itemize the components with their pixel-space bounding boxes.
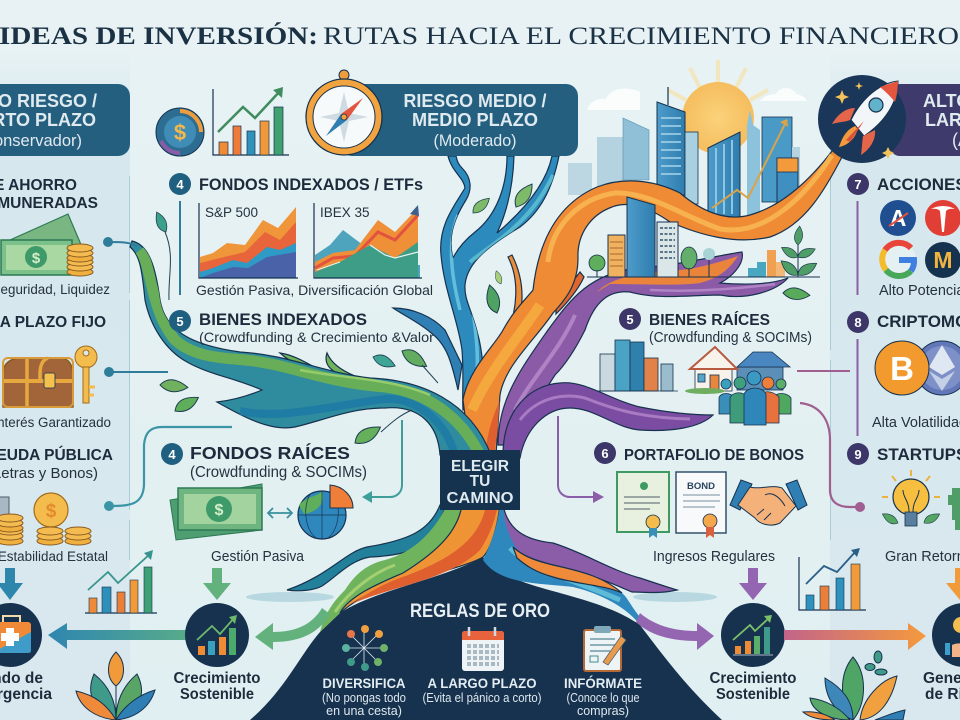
- icon: network: [342, 625, 388, 671]
- panel: low risk banner: [0, 84, 130, 156]
- section: savings account: [0, 177, 98, 212]
- logo: A: [880, 200, 916, 236]
- icon: puzzle: [948, 488, 960, 530]
- label: sustainable growth right: Sostenible: [716, 686, 790, 703]
- logo: A: A: [890, 205, 906, 231]
- icon: rocket: [818, 75, 906, 163]
- icon: growth circle left: [185, 603, 249, 667]
- section 5: real estate heading: BIENES RAÍCES: [649, 310, 770, 329]
- center label: ELEGIR: [451, 458, 509, 475]
- panel: high risk banner: [890, 84, 960, 156]
- tree roots: [246, 505, 717, 632]
- icon: growth circle right: [721, 603, 785, 667]
- icon: plant right: [803, 651, 905, 720]
- arrow: purple down: [739, 568, 767, 600]
- arrow: blue down: [0, 568, 23, 600]
- arrow: orange down: [946, 568, 960, 600]
- icon: compass: [306, 70, 382, 155]
- label: emergency fund: [0, 670, 52, 703]
- rule: diversify: DIVERSIFICA: [322, 675, 406, 691]
- section 5: indexed goods heading: (Crowdfunding & Crecimiento &Valor: [199, 329, 434, 345]
- icon: bond document: [676, 472, 726, 538]
- arrow: purple small down-right: [558, 416, 604, 503]
- connector: purple to crypto: [797, 370, 850, 372]
- section 5: indexed goods heading: [169, 310, 434, 345]
- icon: plant left: [76, 652, 155, 720]
- line: purple vertical: [856, 201, 858, 295]
- icon: dollar coin: $: [174, 120, 186, 145]
- heading: golden rules: REGLAS DE ORO: [410, 601, 550, 622]
- logo: M: [925, 242, 960, 278]
- icon: certificate: [617, 472, 669, 538]
- rule: long term: A LARGO PLAZO: [428, 675, 537, 691]
- icon: small buildings: [598, 340, 678, 391]
- branch: purple upper: [498, 252, 788, 445]
- golden rules mound: [250, 557, 722, 720]
- center label: TU: [470, 473, 490, 490]
- branch: green and teal: [130, 241, 491, 455]
- icon: light bulb: [880, 470, 941, 527]
- title: RUTAS HACIA EL CRECIMIENTO FINANCIERO: [323, 23, 959, 50]
- thin sprout left: [165, 232, 170, 300]
- rule: inform yourself: compras): [577, 704, 629, 718]
- arrow: orange right: [784, 623, 926, 650]
- icon: cash stack: [170, 484, 262, 540]
- rule: diversify: (No pongas todo: [322, 691, 406, 705]
- lower city elements: [587, 197, 820, 279]
- section 4: index funds heading: 4: [176, 177, 184, 192]
- panel: medium risk banner: RIESGO MEDIO /: [404, 91, 546, 111]
- rule: inform yourself: INFÓRMATE: [564, 674, 642, 691]
- section 5: real estate heading: [619, 308, 812, 346]
- label: sustainable growth left: [174, 670, 260, 703]
- icon: cash stack: $: [215, 502, 224, 519]
- logo: M: M: [933, 247, 953, 273]
- arrow: green curved left: [255, 608, 330, 650]
- chart: lower left bars: [85, 550, 157, 613]
- title: IDEAS DE INVERSIÓN:: [0, 22, 318, 50]
- icon: bitcoin: B: [890, 350, 914, 387]
- rule: inform yourself: (Conoce lo que: [566, 691, 640, 705]
- section 6: bonds heading: 6: [601, 446, 609, 461]
- chart: IBEX 35: IBEX 35: [320, 205, 370, 220]
- leaves: [152, 180, 810, 448]
- chart: lower right bars: [799, 548, 866, 610]
- branch: orange: [463, 143, 843, 455]
- label: wealth generation: [923, 670, 960, 703]
- rule: long term: (Evita el pánico a corto): [422, 691, 542, 705]
- icon: ethereum: [915, 341, 960, 395]
- chart: IBEX 35: [314, 203, 422, 278]
- icon: handshake: [730, 480, 807, 525]
- rule: diversify: en una cesta): [326, 704, 402, 718]
- arrow: green down: [203, 568, 231, 600]
- section 6: bonds heading: [594, 442, 804, 464]
- section 8: crypto heading: 8: [854, 315, 862, 330]
- section 4: real estate funds heading: [161, 442, 367, 481]
- text: state stability: Estabilidad Estatal: [0, 549, 108, 564]
- connector: deposit: [104, 367, 168, 377]
- panel: golden rules: [322, 601, 642, 718]
- tree branches: [130, 143, 843, 458]
- icon: emergency briefcase: [0, 603, 42, 667]
- branch: purple lower: [503, 383, 713, 458]
- icon: treasure chest: [3, 358, 73, 407]
- connector: debt: [104, 427, 232, 511]
- label: sustainable growth left: Sostenible: [180, 686, 254, 703]
- section 5: real estate heading: 5: [626, 312, 634, 327]
- section 6: bonds heading: PORTAFOLIO DE BONOS: [624, 447, 804, 464]
- chart: S&P 500: [199, 203, 298, 278]
- section 9: startups heading: [847, 443, 960, 465]
- section 4: real estate funds heading: FONDOS RAÍCES: [190, 442, 350, 463]
- line: purple vertical lower: [856, 339, 858, 436]
- center label: CAMINO: [446, 490, 514, 507]
- branch: blue: [393, 156, 559, 410]
- icon: coins stacks: $: [46, 501, 57, 522]
- icon: banknotes and coins: [1, 214, 93, 276]
- arrow: left big: [48, 623, 187, 649]
- section 4: real estate funds heading: (Crowdfunding & SOCIMs): [190, 464, 367, 481]
- connector: purple to startups: [800, 403, 865, 512]
- section 8: crypto heading: [847, 311, 960, 333]
- text: passive management global: Gestión Pasiva, Diversificación Global: [196, 282, 433, 298]
- text: passive management: Gestión Pasiva: [211, 549, 305, 565]
- rule: diversify: [322, 675, 406, 718]
- icon: bond document: BOND: [687, 481, 715, 492]
- section 4: index funds heading: FONDOS INDEXADOS / ETFs: [199, 175, 423, 194]
- icon: houses: [685, 347, 790, 394]
- section 7: stocks heading: [847, 173, 960, 195]
- title: [0, 22, 959, 50]
- section 9: startups heading: 9: [854, 447, 862, 462]
- section 7: stocks heading: 7: [854, 177, 862, 192]
- icon: key: [75, 346, 97, 403]
- rule: long term: [422, 675, 542, 705]
- icon: bitcoin: [875, 341, 929, 395]
- text: regular income: Ingresos Regulares: [653, 549, 775, 565]
- label: sustainable growth right: [710, 670, 796, 703]
- panel: medium risk banner: [340, 84, 578, 156]
- section 5: real estate heading: (Crowdfunding & SOCIMs): [649, 330, 812, 346]
- logo: G: [880, 242, 916, 278]
- center label: [440, 450, 520, 510]
- label: sustainable growth right: Crecimiento: [710, 670, 796, 687]
- icon: clipboard: [584, 626, 626, 671]
- section 5: indexed goods heading: 5: [176, 314, 184, 329]
- icon: globe with pie: [298, 485, 353, 539]
- chart: S&P 500: S&P 500: [205, 205, 258, 220]
- icon: wealth circle: [932, 603, 960, 667]
- chart: top left bars: [213, 87, 289, 155]
- icon: coins stacks: [0, 493, 91, 545]
- label: sustainable growth left: Crecimiento: [174, 670, 260, 687]
- logo: T: [925, 200, 960, 236]
- section 5: indexed goods heading: BIENES INDEXADOS: [199, 311, 367, 329]
- arrow: double sided: [268, 508, 292, 518]
- icon: people group: [719, 371, 791, 425]
- cityscape: [568, 60, 807, 218]
- rule: inform yourself: [564, 674, 642, 718]
- icon: dollar coin: [156, 108, 204, 156]
- line: index section: [179, 201, 181, 295]
- section 4: real estate funds heading: 4: [168, 447, 176, 462]
- arrow: purple curved right: [636, 613, 714, 650]
- panel: medium risk banner: MEDIO PLAZO: [412, 110, 538, 130]
- section: public debt: [0, 446, 113, 482]
- panel: medium risk banner: (Moderado): [434, 131, 516, 150]
- icon: banknotes and coins: $: [32, 250, 41, 267]
- connector: savings: [103, 237, 137, 247]
- arrow: teal small down-left: [362, 420, 402, 503]
- icon: calendar: [462, 627, 504, 671]
